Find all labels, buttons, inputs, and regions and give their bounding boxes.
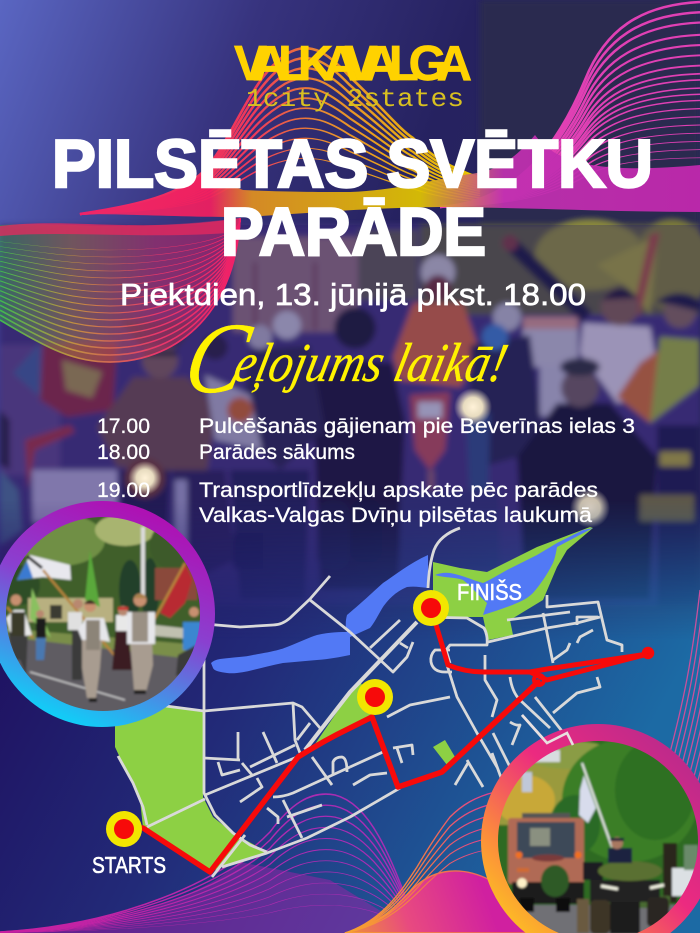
flag green — [85, 550, 100, 607]
photo tint overlay — [0, 225, 700, 605]
flat cap man — [517, 403, 657, 600]
schedule row 18.00: 18.00 — [97, 441, 150, 464]
map label: start: STARTS — [92, 852, 166, 878]
wave: bottom purple — [0, 794, 420, 933]
map: parade route — [143, 608, 652, 872]
truck — [508, 818, 584, 884]
marcher left — [8, 631, 28, 673]
map: stop marker start — [106, 811, 142, 847]
poles — [7, 563, 185, 662]
marcher in blue vest — [183, 622, 201, 650]
script subtitle: C — [175, 301, 261, 414]
marcher central left — [82, 640, 102, 698]
number bike — [410, 392, 450, 470]
schedule row 19.00: Valkas-Valgas Dvīņu pilsētas laukumā — [199, 504, 592, 527]
marcher in blue jeans — [36, 618, 46, 638]
route map — [92, 527, 652, 878]
flag white-blue — [17, 555, 71, 580]
schedule row 18.00 — [97, 441, 355, 464]
logo wordmark: VALKAVALGA — [234, 37, 472, 91]
right bike — [657, 425, 700, 605]
marcher central right — [130, 640, 153, 692]
woman in striped skirt — [112, 628, 132, 670]
wave: right magenta — [440, 2, 700, 207]
ATV — [583, 862, 603, 880]
road overlapping ring — [522, 715, 573, 745]
map: stop marker finish — [413, 590, 449, 626]
wave: right edge — [668, 590, 700, 878]
schedule — [97, 415, 635, 527]
title — [52, 126, 653, 270]
title line 1: PILSĒTAS SVĒTKU — [52, 126, 653, 202]
schedule row 18.00: Parādes sākums — [199, 441, 355, 464]
map: stop marker middle — [357, 679, 393, 715]
wave: bottom orange-pink — [345, 792, 530, 933]
title line 2: PARĀDE — [221, 194, 486, 270]
logo tagline: 1city 2states — [246, 84, 464, 114]
schedule row 19.00: Transportlīdzekļu apskate pēc parādes — [199, 479, 598, 502]
ribbon band behind title — [80, 135, 700, 217]
orange rider — [421, 255, 455, 289]
map: roads — [118, 528, 622, 877]
building — [233, 237, 358, 332]
map label: finish: FINIŠS — [457, 578, 522, 605]
autumn trees — [420, 225, 700, 315]
photo circle: folk costume marchers — [0, 501, 215, 727]
background photo: parade riders — [0, 0, 700, 605]
flag and pole — [582, 763, 612, 847]
schedule row 19.00 — [97, 479, 598, 527]
photo circle: decorated truck and ATV — [481, 715, 700, 933]
headlights — [128, 461, 162, 495]
wave: upper left green-pink — [0, 218, 240, 362]
date line: Piektdien, 13. jūnijā plkst. 18.00 — [120, 277, 586, 312]
schedule row 17.00: Pulcēšanās gājienam pie Beverīnas ielas 3 — [199, 415, 635, 438]
marcher back — [72, 625, 82, 680]
crowd centre — [273, 311, 301, 339]
map: green areas — [115, 527, 593, 872]
central biker — [334, 307, 376, 349]
lower gradient fading over the photo — [0, 480, 700, 933]
raised arm man — [510, 243, 587, 317]
flag red — [160, 563, 192, 618]
map: water — [211, 528, 593, 673]
schedule row 17.00: 17.00 — [97, 415, 150, 438]
schedule row 19.00: 19.00 — [97, 479, 150, 502]
logo — [234, 37, 472, 114]
wave: center red-yellow — [80, 48, 480, 215]
script subtitle: eļojums laikā! — [229, 334, 513, 394]
left men — [13, 343, 40, 397]
helmets — [493, 303, 521, 331]
kid in green jersey — [650, 337, 700, 423]
